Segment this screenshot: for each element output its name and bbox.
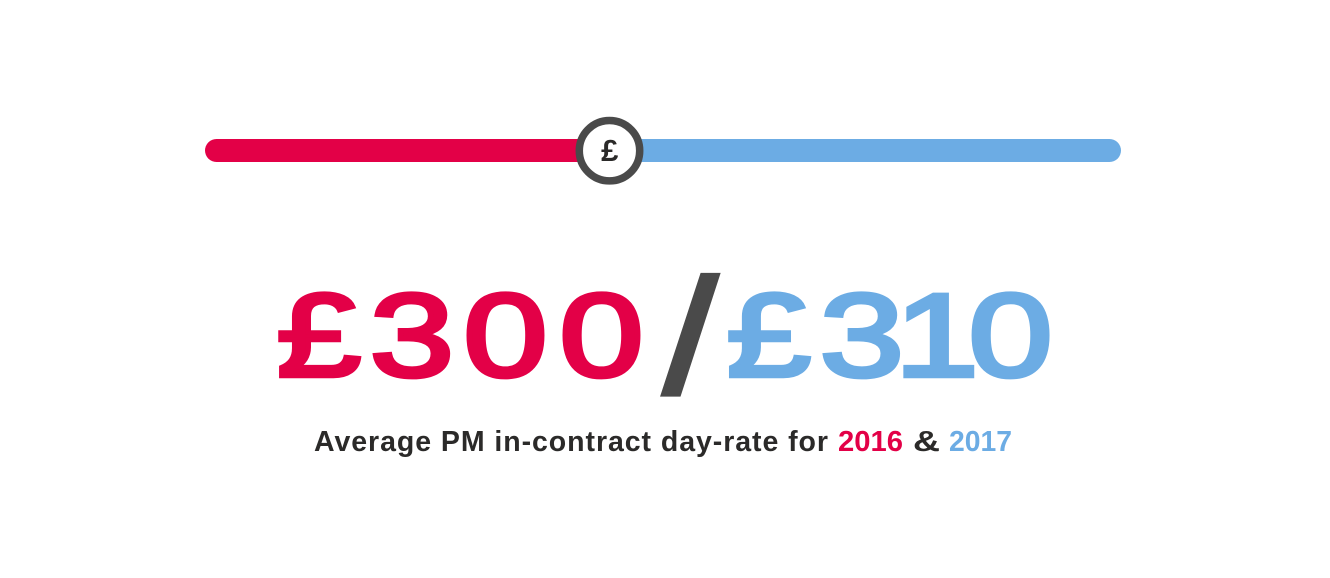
bar: 2017 segment [610,139,1121,162]
figure: 2017 rate: £310 [727,269,1053,401]
caption: 2016 [838,426,903,458]
caption: Average PM in-contract day-rate for [314,426,828,458]
headline figures [277,246,1053,428]
caption: & [913,426,940,458]
caption: 2017 [949,426,1012,458]
icon: pound coin [579,120,640,181]
slash divider: / [663,246,719,428]
bar: 2016 segment [205,139,610,162]
icon: pound coin: £ [601,133,618,168]
figure: 2016 rate: £300 [277,269,643,401]
comparison bar [205,120,1121,181]
